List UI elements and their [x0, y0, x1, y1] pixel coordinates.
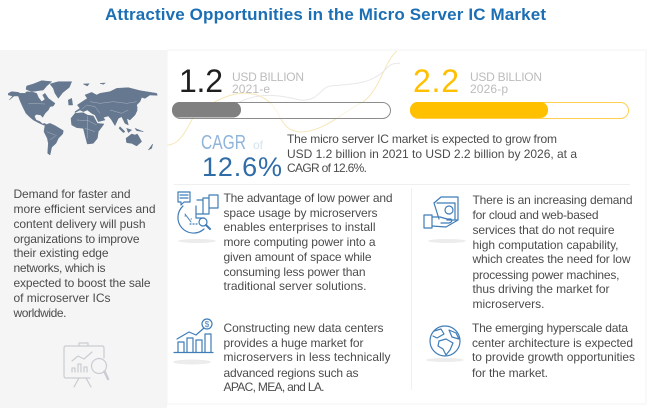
icon: pie chart, bars and magnifier [178, 192, 218, 243]
text block: edge networks [12, 187, 156, 320]
text block: cloud services demand: There is an increasing demand [472, 193, 632, 207]
text block: market growth: The micro server IC market is expected to grow from [287, 132, 557, 146]
world map [8, 81, 157, 155]
text block: low power advantage: space usage by microservers [224, 206, 378, 220]
text block: edge networks: expected to boost the sale [14, 276, 151, 290]
value: 2026 market size [413, 63, 542, 99]
panel: left summary [0, 50, 167, 408]
text block: edge networks: networks, which is [14, 261, 106, 275]
CAGR callout: CAGR [201, 132, 246, 154]
text block: cloud services demand: processing power machines, [472, 268, 620, 282]
text block: cloud services demand: thus driving the market for [472, 282, 610, 296]
value: 2021 market size: 2021-e [232, 82, 270, 96]
icon: growth chart with dollar [173, 319, 213, 364]
text block: low power advantage: given amount of space while [224, 250, 372, 264]
text block: market growth: CAGR of 12.6%. [287, 161, 367, 175]
text block: cloud services demand [472, 193, 632, 311]
icon: globe [426, 326, 464, 362]
text block: new data centers: Constructing new data centers [224, 321, 384, 335]
text block: hyperscale architecture [472, 321, 635, 380]
value: 2026 market size: USD BILLION [470, 70, 542, 84]
text block: cloud services demand: for cloud and web-based [472, 208, 598, 222]
text block: low power advantage [224, 191, 392, 293]
text block: low power advantage: more computing power into a [224, 235, 376, 249]
text block: edge networks: Demand for faster and [14, 187, 130, 201]
text block: hyperscale architecture: The emerging hyperscale data [472, 321, 628, 335]
text block: cloud services demand: which creates the need for low [472, 252, 631, 266]
text block: new data centers: APAC, MEA, and LA. [224, 380, 324, 394]
text block: edge networks: more efficient services and [14, 202, 156, 216]
text block: edge networks: content delivery will push [14, 217, 146, 231]
text block: new data centers: advanced regions such as [224, 366, 358, 380]
text block: new data centers: microservers in less technically [224, 350, 390, 364]
text block: hyperscale architecture: to provide growth opportunities [472, 350, 635, 364]
text block: low power advantage: traditional server solutions. [224, 279, 366, 293]
text block: cloud services demand: high computation capability, [472, 238, 618, 252]
text block: cloud services demand: microservers. [472, 297, 544, 311]
text block: market growth [287, 132, 577, 175]
progress bar: 2026 [410, 102, 628, 118]
CAGR callout: 12.6% [202, 152, 282, 182]
CAGR callout: of [253, 138, 264, 152]
value: 2026 market size: 2.2 [413, 63, 459, 99]
text block: hyperscale architecture: for the market. [472, 366, 548, 380]
icon: analytics presentation board [64, 343, 108, 387]
value: 2021 market size [179, 63, 304, 99]
value: 2026 market size: 2026-p [470, 82, 508, 96]
text block: low power advantage: The advantage of low power and [224, 191, 392, 205]
icon: hand holding money [424, 197, 466, 243]
icon: growth chart with dollar: $ [205, 320, 210, 329]
text block: edge networks: organizations to improve [14, 232, 140, 246]
text block: market growth: USD 1.2 billion in 2021 to USD 2.2 billion by 2026, at a [287, 147, 577, 161]
text block: new data centers [224, 321, 390, 394]
title: Attractive Opportunities in the Micro Server IC Market [105, 5, 546, 24]
text block: cloud services demand: services that do not require [472, 223, 615, 237]
text block: low power advantage: enables enterprises to install [224, 220, 376, 234]
text block: edge networks: their existing edge [14, 246, 109, 260]
value: 2021 market size: 1.2 [179, 63, 223, 99]
text block: hyperscale architecture: center architecture is expected [472, 336, 633, 350]
CAGR callout [201, 132, 282, 182]
text block: new data centers: provides a huge market for [224, 336, 364, 350]
value: 2021 market size: USD BILLION [232, 70, 304, 84]
text block: edge networks: worldwide. [12, 306, 66, 320]
text block: low power advantage: consuming less power than [224, 265, 366, 279]
text block: edge networks: of microserver ICs [14, 291, 110, 305]
progress bar: 2021 [172, 102, 390, 118]
